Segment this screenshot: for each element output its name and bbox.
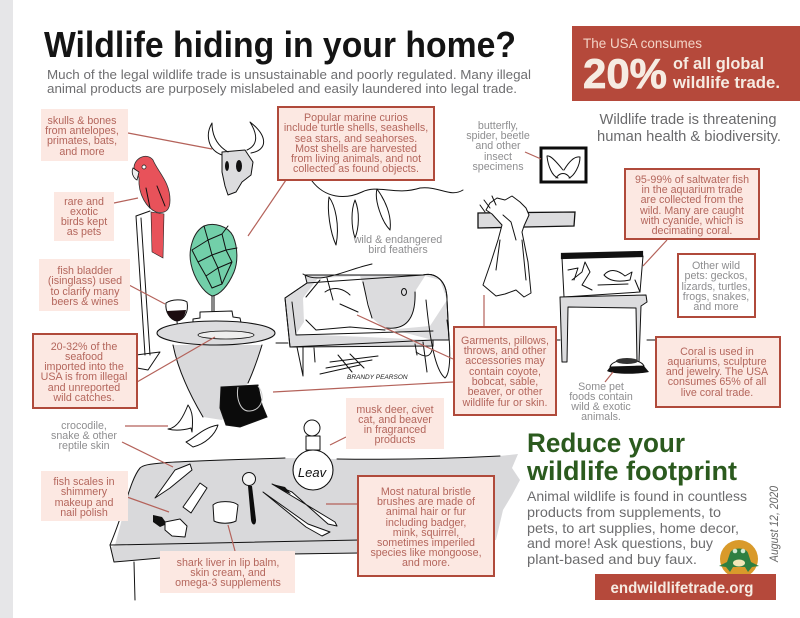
illustration: sofa: BRANDY PEARSON <box>347 374 408 381</box>
callout: musk <box>346 398 444 449</box>
callout: musk: musk deer, civet <box>356 404 434 416</box>
callout: bristle brushes: species like mongoose, <box>370 547 482 559</box>
website banner <box>595 574 776 600</box>
intro text: Much of the legal wildlife trade is unsustainable and poorly regulated. Many illegal <box>47 67 531 82</box>
callout: marine curios: sea stars, and seahorses. <box>295 133 417 145</box>
label: pet foods <box>569 381 633 423</box>
label: pet foods: animals. <box>581 411 621 423</box>
illustration: perfume bottle: Leav <box>298 465 328 480</box>
callout: exotic birds: exotic <box>70 206 99 218</box>
label: bird feathers: bird feathers <box>368 244 428 256</box>
callout: garments: bobcat, sable, <box>472 376 538 388</box>
body text: reduce: and more! Ask questions, buy <box>527 535 713 551</box>
callout: garments: contain coyote, <box>469 366 541 378</box>
illustration: cosmetics and brushes <box>153 464 337 537</box>
illustration: skull <box>208 122 264 195</box>
callout: coral <box>656 337 780 407</box>
callout: fish bladder: to clarify many <box>51 286 120 298</box>
callout: other wild pets: and more <box>693 301 739 313</box>
body text: reduce: products from supplements, to <box>527 504 721 520</box>
callout: musk: in fragranced <box>364 424 426 436</box>
illustration: parrot on perch <box>132 156 170 355</box>
callout: musk: products <box>374 434 416 446</box>
stat panel: USA consumes 20%: The USA consumes <box>583 36 702 51</box>
callout: saltwater fish: in the aquarium trade <box>642 184 743 196</box>
callout: saltwater fish: decimating coral. <box>652 225 732 237</box>
label: insect specimens <box>466 120 530 173</box>
callout: bristle brushes: mink, squirrel, <box>393 527 459 539</box>
callout: marine curios: include turtle shells, seashells, <box>284 122 428 134</box>
illustration: reptile skin shoes <box>168 405 218 447</box>
callout: other wild pets: lizards, turtles, <box>682 281 750 293</box>
label: insect specimens: butterfly, <box>478 120 518 132</box>
label: reptile skin: reptile skin <box>58 440 110 452</box>
label: pet foods: foods contain <box>569 391 633 403</box>
stat panel: USA consumes 20% <box>572 26 800 101</box>
callout: saltwater fish <box>625 169 759 239</box>
callout: fish scales <box>41 471 128 521</box>
body text: reduce <box>527 488 747 567</box>
callout: seafood: wild catches. <box>52 392 115 404</box>
callout: coral: Coral is used in <box>680 346 754 358</box>
callout: saltwater fish: are collected from the <box>641 194 743 206</box>
callout: bristle brushes: Most natural bristle <box>381 486 471 498</box>
callout: shark liver <box>160 551 295 593</box>
callout: skulls and bones <box>41 109 128 161</box>
callout: fish scales: fish scales in <box>53 476 115 488</box>
stat panel: USA consumes 20%: of all global <box>673 55 764 73</box>
callout: garments: accessories may <box>465 355 545 367</box>
callout: garments: wildlife fur or skin. <box>462 397 547 409</box>
label: bird feathers: wild & endangered <box>353 234 442 246</box>
callout: marine curios: Most shells are harvested <box>295 143 417 155</box>
label: pet foods: Some pet <box>578 381 624 393</box>
label: reptile skin <box>51 420 117 452</box>
illustration: sofa <box>285 264 450 381</box>
heading: reduce your wildlife footprint: wildlife footprint <box>526 456 737 486</box>
callout: fish bladder: (isinglass) used <box>48 275 122 287</box>
callout: coral: live coral trade. <box>681 387 753 399</box>
callout: bristle brushes <box>358 476 494 576</box>
threat statement: Wildlife trade is threatening <box>600 112 776 128</box>
callout: fish bladder: fish bladder <box>57 265 113 277</box>
callout: fish scales: makeup and <box>55 497 113 509</box>
illustration: shell sculpture <box>190 224 242 327</box>
callout: bristle brushes: and more. <box>402 557 450 569</box>
callout: saltwater fish: wild. Many are caught <box>639 205 744 217</box>
callout: seafood: imported into the <box>44 361 124 373</box>
illustration: wine glass <box>166 300 187 335</box>
callout: garments: beaver, or other <box>468 386 543 398</box>
callout: seafood: USA is from illegal <box>41 371 127 383</box>
intro text: animal products are purposely mislabeled and easily laundered into legal trade. <box>47 81 517 96</box>
illustration: coat on wall hook <box>478 196 575 297</box>
callout: musk: cat, and beaver <box>358 414 432 426</box>
callout: other wild pets: pets: geckos, <box>685 270 748 282</box>
callout: marine curios: from living animals, and not <box>291 153 421 165</box>
callout: exotic birds: as pets <box>67 226 101 238</box>
callout: other wild pets: Other wild <box>692 260 740 272</box>
stat panel: USA consumes 20%: 20% <box>583 50 667 97</box>
label: reptile skin: crocodile, <box>61 420 107 432</box>
callout: garments: Garments, pillows, <box>461 335 549 347</box>
body text: reduce: Animal wildlife is found in countless <box>527 488 747 504</box>
label: insect specimens: specimens <box>472 161 524 173</box>
illustration: side table <box>136 321 288 420</box>
label: bird feathers <box>353 234 442 256</box>
website banner: endwildlifetrade.org <box>610 580 754 597</box>
icon: frog logo <box>719 540 759 578</box>
callout: skulls and bones: from antelopes, <box>45 125 119 137</box>
callout: coral: and jewelry. The USA <box>666 366 769 378</box>
callout: seafood: 20-32% of the <box>51 341 117 353</box>
illustration: feather garland <box>312 181 463 245</box>
callout: marine curios: Popular marine curios <box>304 112 408 124</box>
callout: bristle brushes: sometimes imperiled <box>377 537 475 549</box>
stat panel: USA consumes 20%: wildlife trade. <box>672 74 780 92</box>
callout: exotic birds <box>54 192 114 241</box>
callout: shark liver: skin cream, and <box>190 567 266 579</box>
callout: bristle brushes: animal hair or fur <box>386 506 467 518</box>
callout: coral: aquariums, sculpture <box>667 356 767 368</box>
illustration: aquarium on stand <box>557 252 656 362</box>
intro text <box>47 67 531 96</box>
illustration: perfume bottle <box>293 420 333 490</box>
label: insect specimens: spider, beetle <box>466 130 530 142</box>
threat statement <box>597 112 781 145</box>
callout: skulls and bones: primates, bats, <box>47 135 117 147</box>
callout: saltwater fish: with cyanide, which is <box>640 215 743 227</box>
callout: marine curios <box>278 107 434 180</box>
callout: seafood <box>33 334 137 408</box>
callout: fish scales: nail polish <box>60 507 108 519</box>
callout: garments <box>454 327 556 415</box>
label: insect specimens: and other <box>475 140 521 152</box>
callout: skulls and bones: skulls & bones <box>48 115 116 127</box>
connector lines <box>114 133 667 551</box>
title: Wildlife hiding in your home? <box>44 24 516 65</box>
callout: fish bladder: beers & wines <box>51 296 119 308</box>
body text: reduce: pets, to art supplies, home decor, <box>527 520 739 536</box>
illustration: desk <box>110 454 520 600</box>
callout: skulls and bones: and more <box>59 146 105 158</box>
illustration: handbag <box>220 385 267 427</box>
callout: fish bladder <box>39 259 130 311</box>
illustration: framed butterfly <box>541 148 586 182</box>
callout: bristle brushes: brushes are made of <box>377 496 475 508</box>
callout: shark liver: shark liver in lip balm, <box>177 557 279 569</box>
callout: fish scales: shimmery <box>61 486 108 498</box>
callout: seafood: seafood <box>65 351 103 363</box>
threat statement: human health & biodiversity. <box>597 129 781 145</box>
illustration: pet food bowl <box>607 358 649 374</box>
heading: reduce your wildlife footprint <box>526 428 737 486</box>
callout: seafood: and unreported <box>48 382 120 394</box>
date: August 12, 2020 <box>769 485 781 563</box>
body text: reduce: plant-based and buy faux. <box>527 551 697 567</box>
heading: reduce your wildlife footprint: Reduce your <box>527 428 685 458</box>
label: insect specimens: insect <box>484 151 512 163</box>
callout: other wild pets <box>678 254 755 317</box>
callout: bristle brushes: including badger, <box>386 517 466 529</box>
callout: saltwater fish: 95-99% of saltwater fish <box>635 174 749 186</box>
label: reptile skin: snake & other <box>51 430 117 442</box>
callout: exotic birds: birds kept <box>61 216 107 228</box>
callout: exotic birds: rare and <box>64 196 104 208</box>
callout: marine curios: collected as found objects. <box>293 163 419 175</box>
callout: other wild pets: frogs, snakes, <box>683 291 749 303</box>
callout: shark liver: omega-3 supplements <box>175 577 281 589</box>
callout: coral: consumes 65% of all <box>668 376 766 388</box>
callout: garments: throws, and other <box>464 345 547 357</box>
label: pet foods: wild & exotic <box>570 401 631 413</box>
